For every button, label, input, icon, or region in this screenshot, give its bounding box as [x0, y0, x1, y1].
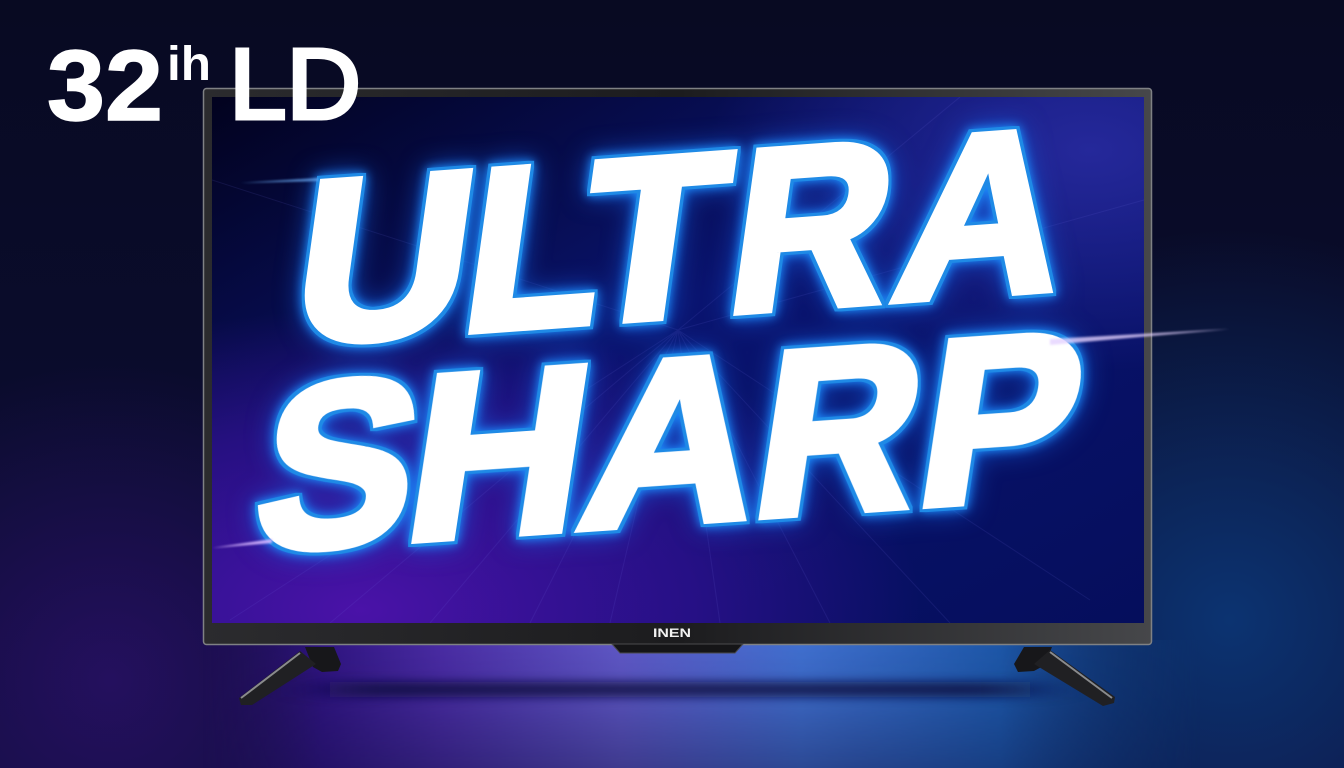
- headline: ULTRA: [280, 78, 1083, 394]
- right stand leg: [1014, 647, 1115, 706]
- headline: ULTRA: A: [882, 79, 1083, 351]
- headline: SHARP: H: [392, 315, 607, 592]
- left stand leg: [239, 647, 341, 705]
- headline: SHARP: S: [241, 327, 437, 602]
- tv screen: [212, 97, 1144, 623]
- corner label: 32 inch LED: 32: [47, 30, 163, 142]
- headline: ULTRA: T: [566, 103, 743, 373]
- headline: SHARP: P: [904, 282, 1099, 557]
- tv bottom notch: [612, 644, 743, 653]
- corner label: 32 inch LED: LD: [229, 28, 361, 140]
- corner label: 32 inch LED: ih: [167, 38, 211, 91]
- headline: SHARP: R: [740, 292, 940, 567]
- headline: ULTRA: R: [716, 92, 909, 363]
- floor shadow: [330, 682, 1030, 697]
- headline: ULTRA: L: [451, 112, 623, 381]
- television: [204, 88, 1152, 653]
- floor light pool: [232, 645, 1150, 768]
- headline: SHARP: A: [567, 302, 780, 579]
- brand logo: INEN: [653, 628, 691, 640]
- lens flares: [212, 178, 1230, 548]
- headline: SHARP: [241, 280, 1100, 602]
- headline: [241, 78, 1100, 602]
- corner label: 32 inch LED: [47, 28, 361, 142]
- headline: ULTRA: U: [280, 120, 490, 394]
- tv outer frame: [204, 88, 1152, 644]
